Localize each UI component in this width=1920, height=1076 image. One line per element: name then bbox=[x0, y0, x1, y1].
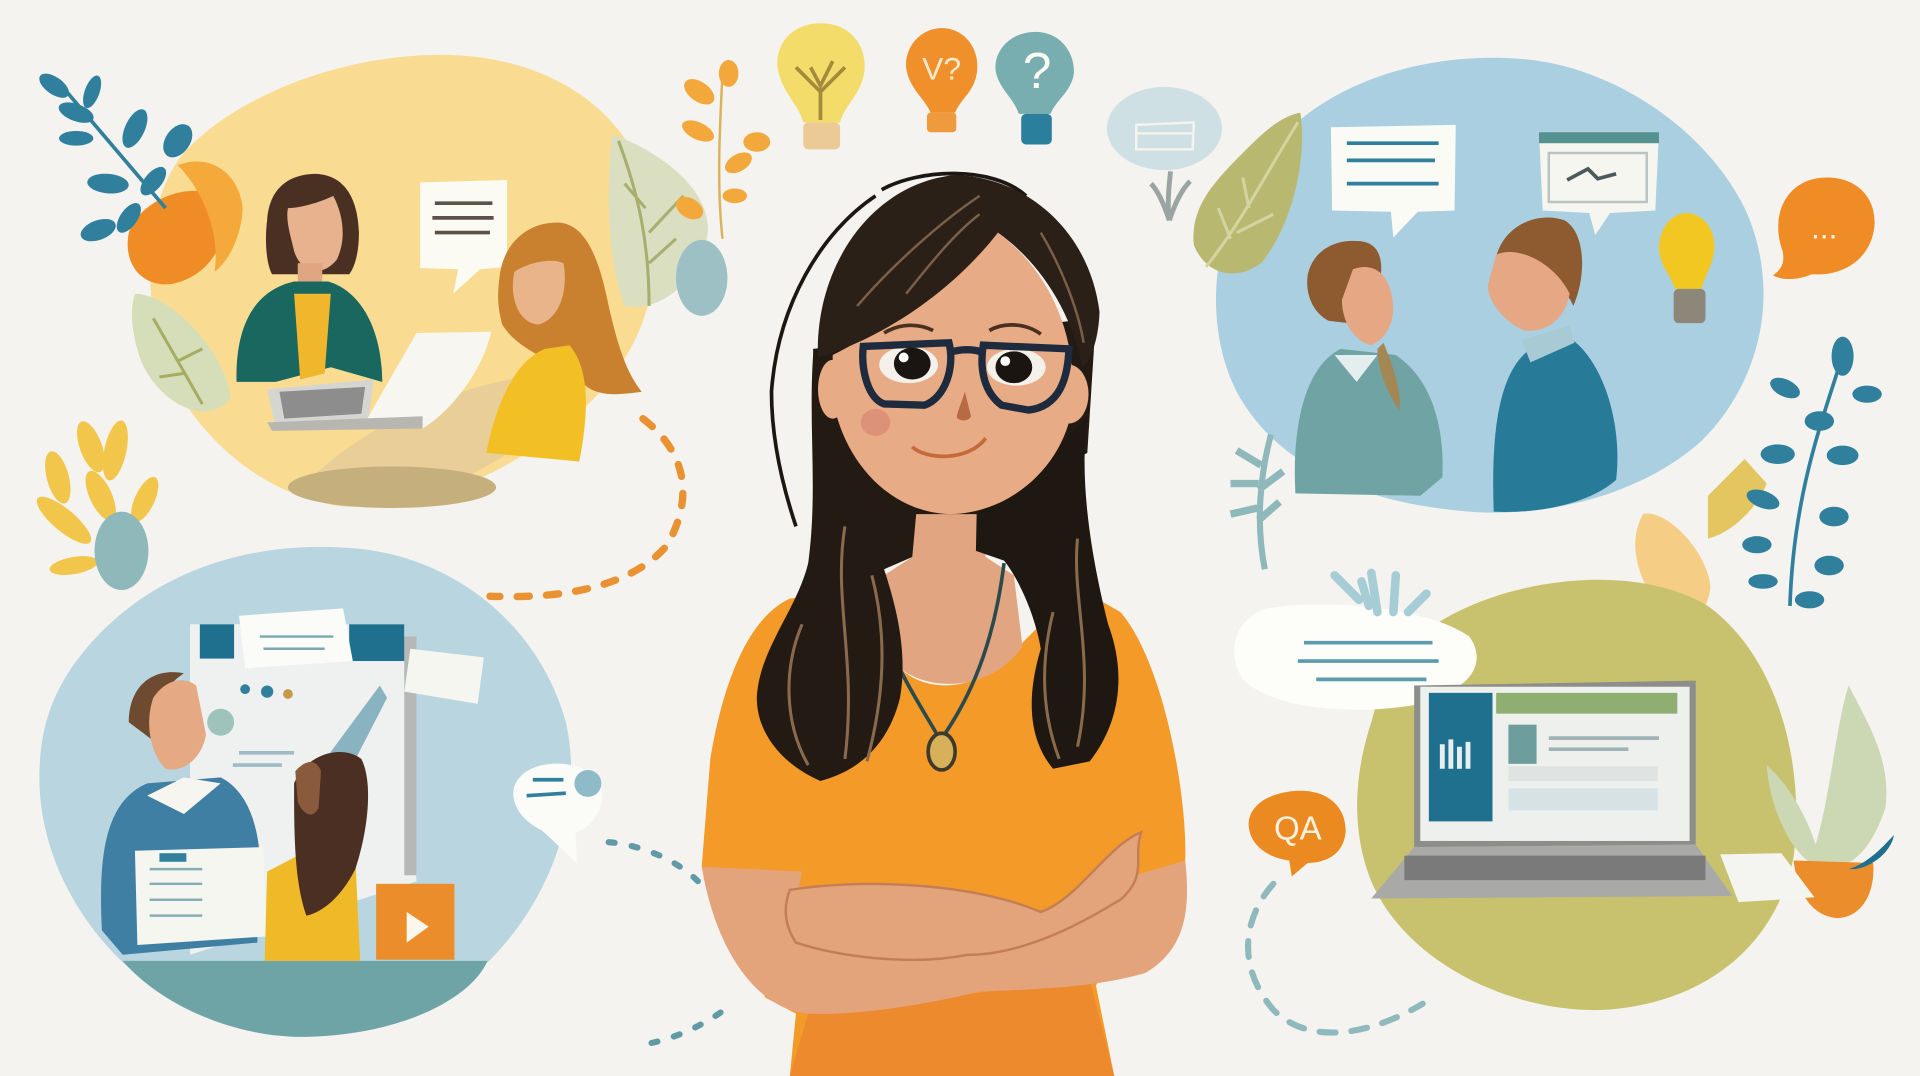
cheek bbox=[861, 409, 890, 436]
icon: pale tree right bbox=[609, 135, 708, 307]
arrow: orange dashed path bbox=[490, 419, 683, 597]
central woman bbox=[702, 174, 1187, 1076]
icon: yellow lightbulb bbox=[1659, 213, 1714, 323]
panel: meeting at laptop, yellow blob bbox=[128, 55, 708, 508]
icon: teal question bulb bbox=[995, 32, 1074, 144]
orange shirt bbox=[702, 588, 1185, 1076]
arrow: teal dashed curve bottom right bbox=[1248, 884, 1423, 1033]
crossed arms bbox=[702, 832, 1187, 1014]
icon: yellow leaves left with teal pot bbox=[31, 418, 164, 590]
arrow: teal dots bottom bbox=[652, 1011, 723, 1043]
icon: pale blue speech bubble with card bbox=[1107, 87, 1222, 220]
icon: yellow lightbulb bbox=[777, 23, 865, 149]
speech bubble: notes bbox=[420, 180, 507, 294]
man left bbox=[1295, 241, 1443, 496]
icon: small teal sprig bbox=[1231, 435, 1283, 569]
icon: pale green leaf left bbox=[132, 294, 230, 412]
icon: laptop bbox=[267, 332, 491, 431]
face bbox=[833, 233, 1073, 514]
hair lower left bbox=[757, 355, 918, 781]
glasses bbox=[863, 343, 1069, 410]
woman with long dark hair bbox=[265, 752, 368, 961]
icon: small white speech bubble with globe bbox=[513, 764, 603, 863]
woman with auburn hair bbox=[486, 223, 642, 461]
arrow: teal dots to woman bbox=[609, 842, 698, 881]
icon: QA orange speech bubble bbox=[1249, 791, 1346, 876]
icon: blue fern top-left bbox=[35, 69, 198, 246]
icon: potted plant with paper bbox=[1720, 686, 1894, 918]
speech bubble: chart bbox=[1539, 132, 1659, 235]
burst bbox=[1335, 573, 1426, 612]
icon: laptop with page bbox=[1371, 681, 1732, 899]
icon: yellow shape and blue fern right bbox=[1635, 337, 1882, 623]
icon: QA orange speech bubble: QA bbox=[1274, 811, 1322, 848]
icon: orange speech bubble with dots bbox=[1773, 177, 1875, 279]
eye whites bbox=[879, 346, 938, 383]
panel: laptop, olive blob bbox=[1234, 573, 1796, 1010]
man in blue jacket bbox=[101, 672, 260, 955]
hair lower right bbox=[976, 416, 1118, 769]
icon: orange sprig top bbox=[672, 60, 770, 316]
icon: orange leaves bbox=[128, 161, 243, 284]
document board bbox=[190, 608, 484, 955]
speech bubble: white bbox=[1234, 604, 1477, 710]
ears bbox=[1049, 365, 1089, 424]
man right bbox=[1488, 217, 1617, 512]
thin loose hair strands bbox=[771, 174, 1026, 526]
hair crown and fringe bbox=[818, 175, 1100, 367]
necklace bbox=[890, 563, 1004, 770]
icon: orange speech bubble with dots: ... bbox=[1811, 210, 1837, 246]
open book bbox=[135, 847, 266, 945]
hair behind face bbox=[813, 318, 1096, 514]
icon: orange video play tile bbox=[376, 884, 454, 960]
eyes bbox=[894, 348, 931, 379]
speech bubble: left bbox=[1331, 125, 1456, 237]
icon: teal question bulb: ? bbox=[1023, 41, 1051, 99]
panel: two men talking, blue blob bbox=[1193, 58, 1764, 513]
icon: orange bulb with mark: V? bbox=[922, 51, 961, 87]
eyebrows, nose and mouth bbox=[884, 325, 1041, 334]
icon: orange bulb with mark bbox=[906, 28, 977, 132]
woman with dark hair bbox=[236, 174, 382, 382]
neck and chest bbox=[884, 490, 1022, 684]
icon: olive leaf bbox=[1193, 113, 1302, 274]
panel: team with documents, blue circle bbox=[39, 547, 571, 1037]
